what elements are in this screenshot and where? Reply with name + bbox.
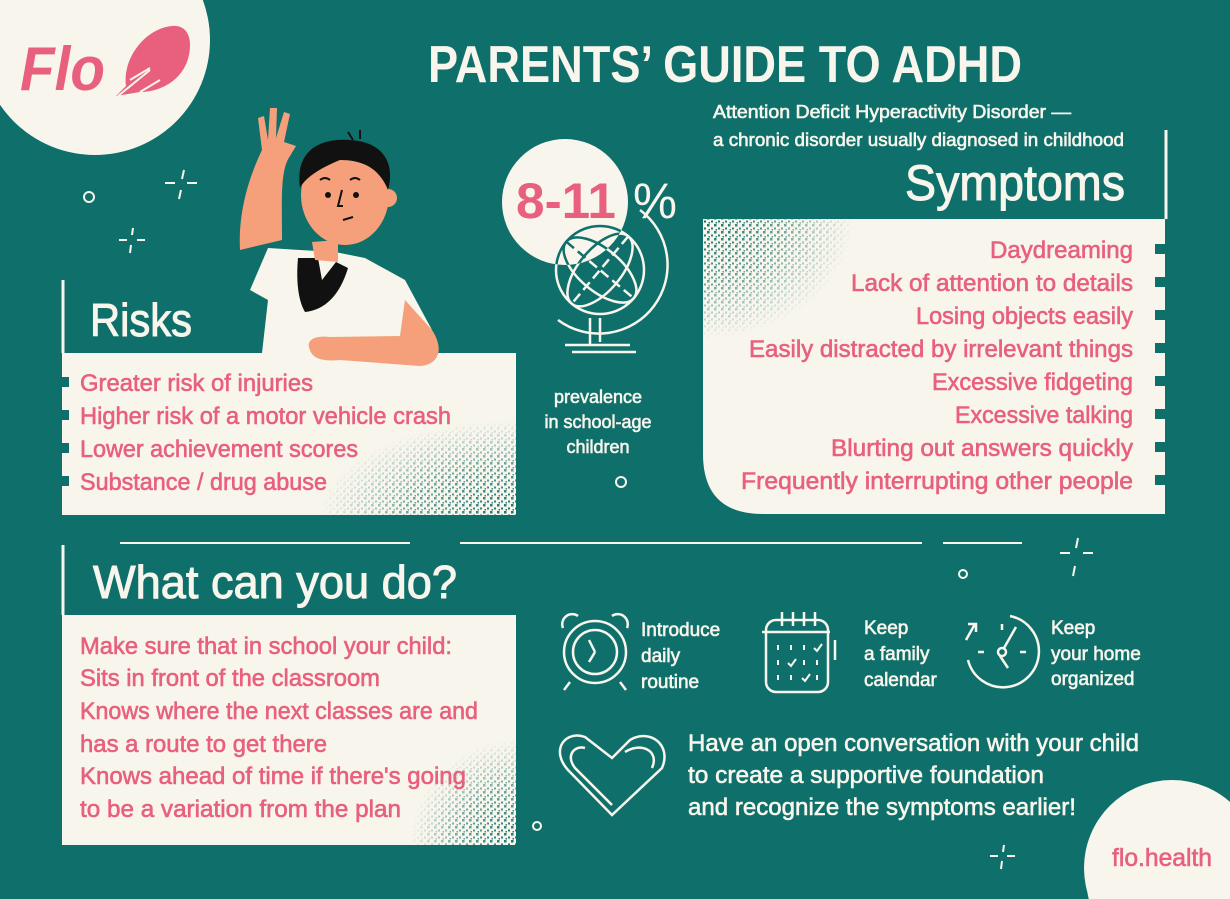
advice list: Knows where the next classes are and [80, 698, 478, 725]
icon: alarm clock [562, 614, 628, 690]
advice list: Make sure that in school your child: [80, 633, 452, 660]
tip: home organized [966, 616, 1141, 690]
symptom list: Excessive talking [955, 402, 1133, 429]
sparkles decor [84, 170, 1093, 869]
tip: daily routine: daily [641, 646, 681, 667]
footer badge: flo.health [1084, 780, 1230, 899]
tip: daily routine: routine [641, 672, 699, 693]
tip: open conversation: Have an open conversation with your child [688, 730, 1139, 757]
stat: prevalence: % [633, 173, 677, 229]
panel: risks [62, 280, 516, 515]
symptom list: Excessive fidgeting [932, 369, 1133, 396]
footer badge: flo.health: flo.health [1112, 844, 1212, 872]
tip: family calendar: a family [864, 644, 930, 665]
tip: home organized: organized [1051, 669, 1134, 690]
tip: daily routine: Introduce [641, 620, 720, 641]
symptom list [741, 237, 1133, 495]
tip: daily routine [562, 614, 720, 693]
panel: symptoms [703, 130, 1166, 514]
tip: family calendar: Keep [864, 618, 908, 639]
stat: prevalence [502, 139, 677, 457]
logo text: Flo: Flo [20, 35, 105, 104]
title: PARENTS’ GUIDE TO ADHD [428, 36, 1022, 94]
prevalence label: prevalence [554, 387, 642, 407]
tip: family calendar [762, 612, 938, 692]
advice list: to be a variation from the plan [80, 796, 401, 823]
logo circle [0, 0, 210, 155]
subtitle: a chronic disorder usually diagnosed in childhood [713, 130, 1124, 150]
icon: calendar [762, 612, 835, 692]
tip: home organized: Keep [1051, 618, 1095, 639]
symptom list: Daydreaming [990, 237, 1133, 264]
tip: open conversation: to create a supportive foundation [688, 762, 1044, 789]
risks list: Higher risk of a motor vehicle crash [80, 403, 451, 430]
tip: open conversation: and recognize the symptoms earlier! [688, 794, 1076, 821]
subtitle: Attention Deficit Hyperactivity Disorder — [713, 102, 1071, 122]
icon: globe [554, 209, 669, 354]
subtitle [713, 102, 1124, 150]
advice list: Knows ahead of time if there's going [80, 763, 466, 790]
symptom list: Blurting out answers quickly [831, 435, 1133, 462]
heading: what can you do: What can you do? [93, 556, 457, 608]
prevalence label: children [566, 437, 630, 457]
tip: home organized: your home [1051, 644, 1141, 665]
risks list: Lower achievement scores [80, 436, 358, 463]
panel: what can you do [62, 545, 516, 845]
icon: clock [966, 616, 1039, 687]
prevalence label: in school-age [544, 412, 652, 432]
advice list [80, 633, 478, 823]
icon: feather [116, 26, 190, 96]
symptom list: Easily distracted by irrelevant things [749, 336, 1133, 363]
advice list: has a route to get there [80, 731, 327, 758]
icon: heart [560, 736, 664, 815]
symptom list: Lack of attention to details [851, 270, 1133, 297]
stat: prevalence: 8-11 [516, 173, 616, 229]
heading: risks: Risks [90, 294, 192, 346]
risks list: Greater risk of injuries [80, 370, 313, 397]
risks list: Substance / drug abuse [80, 469, 327, 496]
advice list: Sits in front of the classroom [80, 665, 380, 692]
tip: open conversation [560, 730, 1139, 821]
symptom list: Losing objects easily [916, 303, 1133, 330]
illustration: child raising hand [240, 108, 439, 366]
symptom list: Frequently interrupting other people [741, 468, 1133, 495]
tip: family calendar: calendar [864, 670, 938, 691]
prevalence label [544, 387, 652, 457]
risks list [80, 370, 451, 496]
heading: symptoms: Symptoms [905, 155, 1125, 211]
